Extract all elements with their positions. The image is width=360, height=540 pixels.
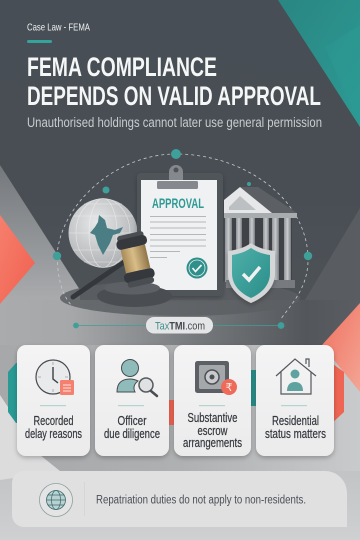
badge: TaxTMI.com — [146, 317, 213, 334]
icon: shield with check — [228, 243, 275, 303]
card text: Officer — [118, 414, 146, 428]
coral shapes behind cards — [165, 362, 344, 425]
orbit dots — [53, 149, 312, 260]
card: residential status matters — [256, 345, 334, 456]
card text — [25, 414, 82, 441]
label: Case Law - FEMA: Case Law - FEMA — [27, 22, 90, 34]
icon: clock with note — [36, 360, 74, 395]
teal sliver behind cards — [249, 370, 258, 406]
teal hexagon behind cards — [8, 363, 40, 423]
icon: bank building — [224, 187, 297, 288]
card text — [183, 411, 242, 450]
card: officer due diligence — [95, 345, 169, 456]
card text: arrangements — [183, 436, 242, 450]
note text: Repatriation duties do not apply to non-residents. — [96, 494, 306, 506]
connector line — [74, 322, 284, 328]
hero illustration — [53, 149, 312, 334]
icon: safe with rupee badge: ₹ — [226, 382, 232, 394]
clipboard with approval document — [137, 165, 223, 296]
icon: house with person — [276, 359, 316, 394]
accent bar — [27, 40, 52, 43]
card text: escrow — [198, 424, 228, 438]
card text: Residential — [272, 414, 319, 428]
card text: status matters — [265, 427, 326, 441]
card: recorded delay reasons — [17, 345, 90, 456]
card text: delay reasons — [25, 427, 82, 441]
icon: globe with India — [68, 198, 138, 268]
ground plate — [60, 280, 300, 316]
card text: Substantive — [188, 411, 238, 425]
card text — [265, 414, 326, 441]
card text — [104, 414, 160, 441]
document heading: APPROVAL: APPROVAL — [152, 195, 204, 211]
bottom note panel — [12, 471, 347, 527]
icon: approval stamp — [186, 258, 208, 278]
card text: due diligence — [104, 427, 160, 441]
card text: Recorded — [34, 414, 74, 428]
icon: gavel — [73, 230, 172, 307]
card: substantive escrow arrangements — [174, 345, 251, 456]
title — [27, 52, 321, 111]
badge: TaxTMI.com: TaxTMI.com — [155, 320, 205, 332]
dashed orbit — [57, 154, 308, 320]
icon: globe badge — [40, 484, 72, 516]
icon: officer with magnifier — [117, 360, 157, 396]
title: FEMA COMPLIANCE — [27, 52, 217, 82]
